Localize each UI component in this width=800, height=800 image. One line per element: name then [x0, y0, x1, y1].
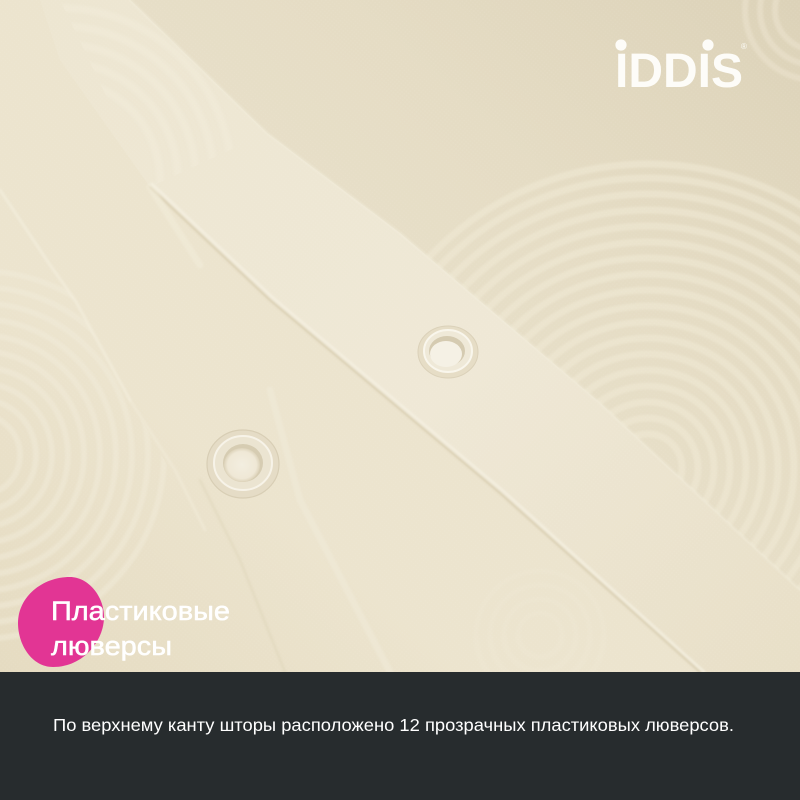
icon: right plastic grommet — [418, 326, 478, 378]
pink blob behind heading — [18, 577, 104, 667]
panel: hem band — [40, 0, 800, 672]
rings: lower faint pattern — [476, 571, 604, 699]
rings: left concentric pattern — [0, 404, 152, 640]
panel: curtain body upper right — [130, 0, 800, 590]
heading: Пластиковые — [51, 596, 230, 626]
heading: люверсы — [51, 631, 172, 661]
rings: top right corner — [745, 0, 800, 80]
rings: hem top-left show-through — [0, 8, 232, 352]
icon: left plastic grommet — [207, 430, 279, 498]
rings: right concentric pattern — [434, 161, 800, 574]
heading — [51, 596, 230, 661]
brand logo: IDDIS — [615, 45, 743, 98]
brand logo: ® — [741, 42, 747, 51]
description text: По верхнему канту шторы расположено 12 прозрачных пластиковых люверсов. — [53, 715, 734, 735]
bottom dark bar — [0, 672, 800, 800]
